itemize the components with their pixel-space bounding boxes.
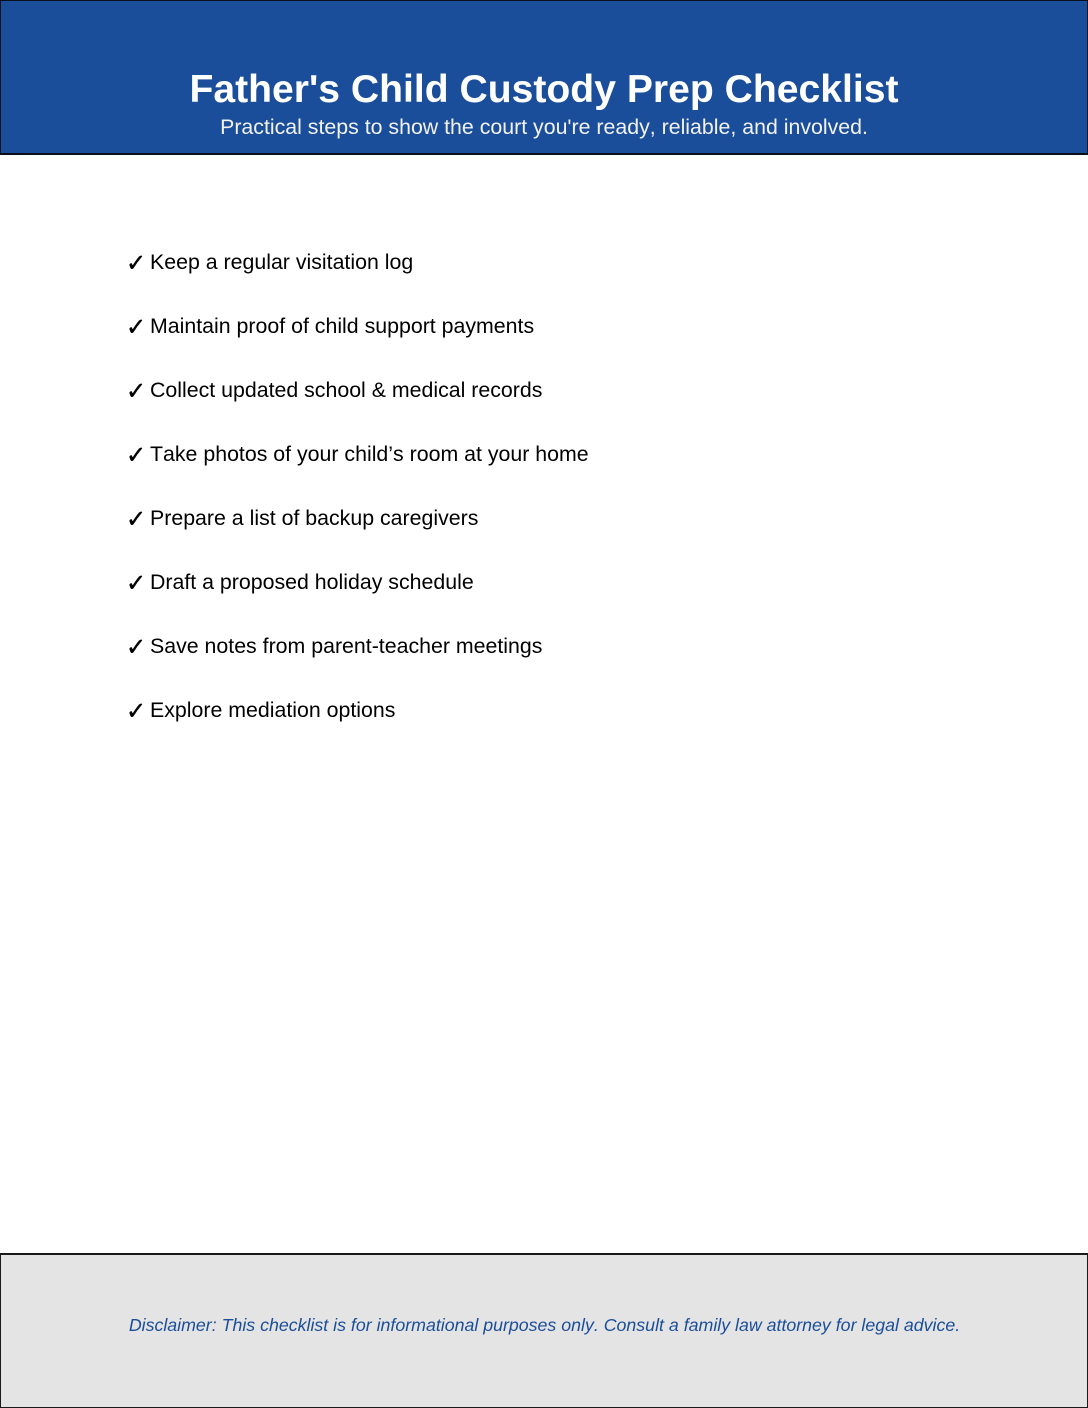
item: room photos: Take photos of your child’s room at your home: [150, 442, 589, 466]
item: child support: ✓: [126, 313, 146, 341]
item: records: Collect updated school & medical records: [150, 378, 542, 402]
item: backup caregivers: ✓: [126, 505, 146, 533]
item: room photos: ✓: [126, 441, 146, 469]
item: holiday schedule: ✓: [126, 569, 146, 597]
disclaimer: Disclaimer: This checklist is for informational purposes only. Consult a family law attorney for legal advice.: [129, 1315, 960, 1335]
item: teacher meetings: Save notes from parent-teacher meetings: [150, 634, 542, 658]
footer panel: [0, 1253, 1088, 1408]
title: Father's Child Custody Prep Checklist: [189, 68, 899, 110]
item: teacher meetings: ✓: [126, 633, 146, 661]
item: mediation: Explore mediation options: [150, 698, 395, 722]
item: visitation log: ✓: [126, 249, 146, 277]
item: mediation: ✓: [126, 697, 146, 725]
checklist: [126, 249, 589, 725]
item: records: ✓: [126, 377, 146, 405]
subtitle: Practical steps to show the court you're ready, reliable, and involved.: [220, 115, 868, 139]
item: visitation log: Keep a regular visitation log: [150, 250, 413, 274]
header banner: [0, 0, 1088, 155]
item: holiday schedule: Draft a proposed holiday schedule: [150, 570, 474, 594]
item: child support: Maintain proof of child support payments: [150, 314, 534, 338]
item: backup caregivers: Prepare a list of backup caregivers: [150, 506, 478, 530]
